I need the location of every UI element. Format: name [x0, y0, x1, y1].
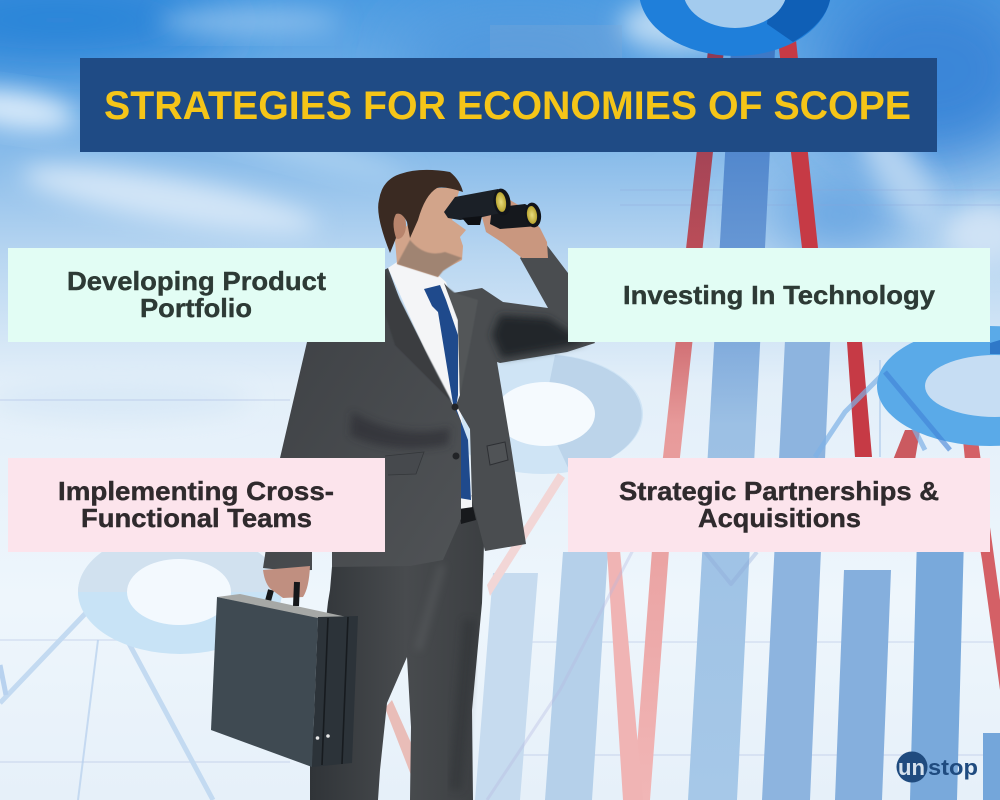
- panel: strategic partnerships and acquisitions: Acquisitions: [698, 503, 861, 533]
- tie: [424, 285, 471, 500]
- shirt: [388, 262, 472, 509]
- sleeve shading: [492, 315, 585, 358]
- donut chart: right: [877, 326, 1000, 450]
- binoculars: [444, 187, 543, 229]
- donut chart: middle: [443, 354, 643, 474]
- panel: developing product portfolio: [8, 248, 385, 342]
- panel: implementing cross-functional teams: Functional Teams: [81, 503, 312, 533]
- hand holding briefcase: [263, 566, 310, 606]
- jacket: [263, 240, 595, 571]
- donut chart: bottom left: [78, 530, 282, 654]
- panel: implementing cross-functional teams: [8, 458, 385, 552]
- belt: [459, 507, 476, 524]
- chart: blue bars: [475, 50, 1000, 800]
- panel: strategic partnerships and acquisitions: [568, 458, 990, 552]
- donut chart: top: [639, 0, 831, 56]
- title banner: [80, 58, 937, 152]
- panel: investing in technology: Investing In Technology: [623, 280, 936, 310]
- head: [378, 170, 466, 277]
- trousers: [310, 495, 484, 800]
- panel: developing product portfolio: Portfolio: [140, 293, 252, 323]
- chart: red line: [385, 40, 1000, 800]
- man with binoculars and briefcase: [211, 170, 595, 800]
- panel: strategic partnerships and acquisitions: Strategic Partnerships &: [619, 476, 939, 506]
- logo: unstop: [896, 752, 978, 782]
- lapels: [378, 272, 452, 402]
- logo: unstop: un: [898, 755, 925, 780]
- briefcase: [211, 590, 358, 767]
- pockets and buttons: [487, 442, 508, 465]
- logo: unstop: stop: [928, 755, 978, 780]
- panel: implementing cross-functional teams: Implementing Cross-: [58, 476, 334, 506]
- hand on binoculars: [482, 200, 548, 258]
- chart: thin trend lines: [0, 360, 925, 800]
- panel: developing product portfolio: Developing Product: [67, 266, 326, 296]
- title banner: STRATEGIES FOR ECONOMIES OF SCOPE: [104, 84, 911, 128]
- panel: investing in technology: [568, 248, 990, 342]
